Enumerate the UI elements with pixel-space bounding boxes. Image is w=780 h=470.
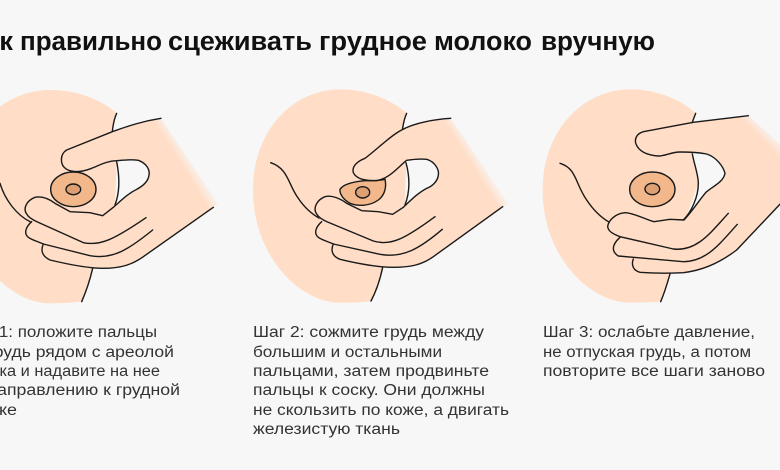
text: step 2: не скользить по коже, а двигать <box>253 402 509 419</box>
title: сцеживать <box>168 28 312 56</box>
areola and nipple <box>630 172 675 207</box>
areola and nipple <box>51 172 96 207</box>
text: step 3: повторите все шаги заново <box>543 363 765 380</box>
illustration: step 1 <box>0 90 218 303</box>
illustration: step 2 <box>253 89 508 303</box>
illustration: step 3 <box>543 89 780 303</box>
text: step 2 <box>253 324 509 438</box>
text: step 3 <box>543 324 765 380</box>
title: грудное <box>319 28 427 56</box>
text: step 1 <box>0 324 180 419</box>
title: правильно <box>20 28 162 56</box>
text: step 2: большим и остальными <box>253 344 442 361</box>
text: step 3: не отпуская грудь, а потом <box>543 344 751 361</box>
title: молоко <box>434 28 532 56</box>
text: step 2: Шаг 2: сожмите грудь между <box>253 324 484 341</box>
text: step 2: пальцами, затем продвиньте <box>253 363 489 380</box>
text: step 3: Шаг 3: ослабьте давление, <box>543 324 755 341</box>
text: step 2: пальцы к соску. Они должны <box>253 382 485 399</box>
areola and nipple <box>340 179 386 205</box>
text: step 2: железистую ткань <box>253 421 400 438</box>
title: вручную <box>541 28 655 56</box>
